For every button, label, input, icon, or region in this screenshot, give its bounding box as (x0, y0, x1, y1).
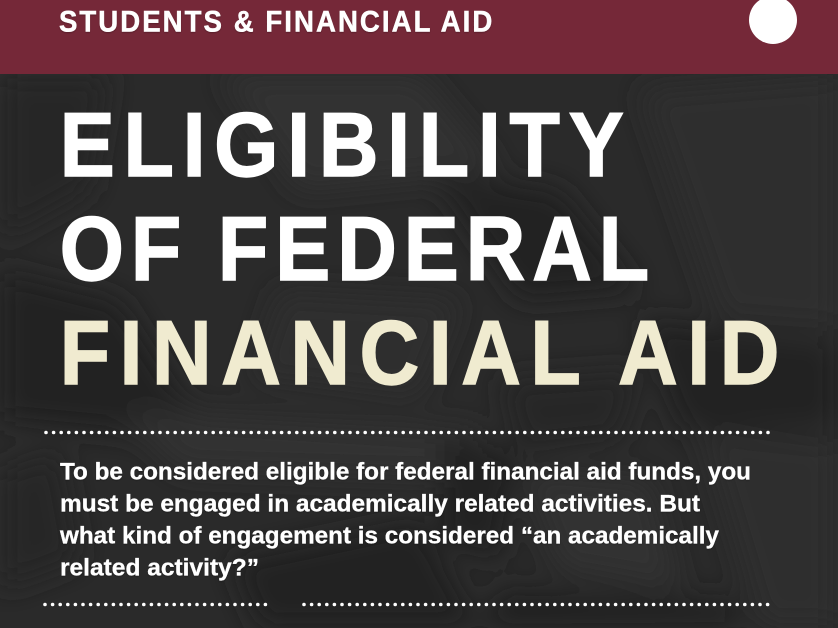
title line: financial aid: FINANCIAL AID (60, 302, 779, 404)
intro paragraph: related activity?” (60, 554, 259, 582)
header label: STUDENTS & FINANCIAL AID (59, 5, 492, 39)
intro paragraph: must be engaged in academically related activities. But (60, 490, 700, 518)
title line: eligibility: ELIGIBILITY (60, 94, 624, 196)
icon: white circle (749, 0, 797, 44)
title line: of federal: OF FEDERAL (60, 198, 649, 300)
intro paragraph: To be considered eligible for federal financial aid funds, you (60, 458, 751, 486)
header band (0, 0, 838, 74)
intro paragraph: what kind of engagement is considered “an academically (59, 522, 720, 550)
title (60, 94, 779, 404)
intro paragraph (59, 458, 751, 582)
